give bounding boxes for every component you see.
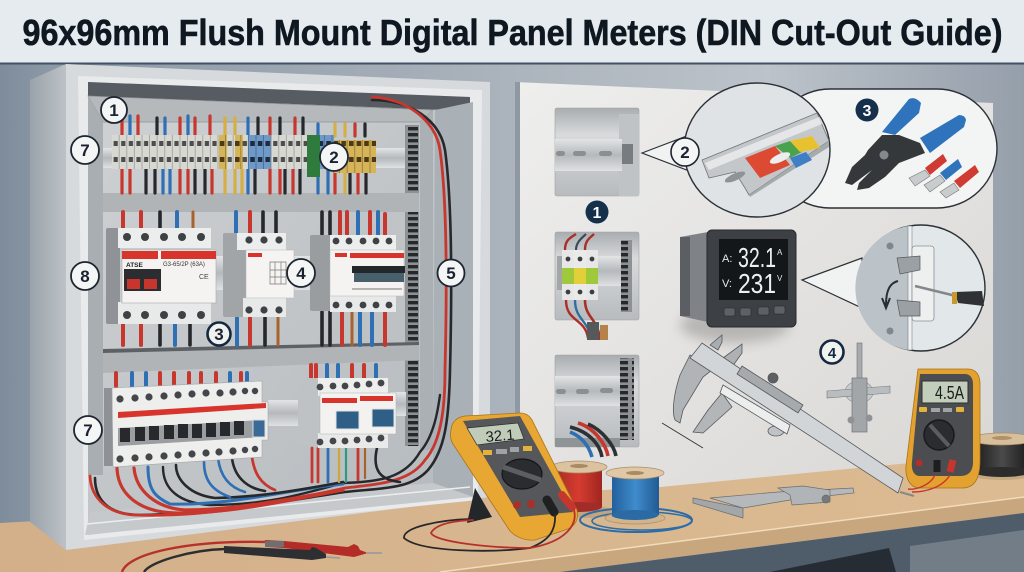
step badge 4: 4: [828, 345, 837, 362]
meter display: V: [777, 274, 783, 283]
4-pole breaker: [310, 235, 405, 312]
contactor: [223, 233, 294, 317]
right multimeter: [906, 369, 980, 492]
6-way MCB block: [298, 378, 396, 448]
icon: crimping pliers: [845, 98, 966, 190]
arrow: release direction: [882, 281, 898, 308]
meter display: A: [777, 248, 783, 257]
panel: open enclosure: [30, 64, 490, 550]
callout 8: [71, 262, 99, 290]
ATSE breaker: G3-65/2P (63A): [163, 262, 205, 268]
cut-out 1: DIN rail: [555, 108, 639, 196]
badge 3: 3: [863, 103, 872, 120]
meter display: V:: [722, 278, 732, 290]
callout 4: 4: [296, 264, 306, 283]
callout 7 upper: [71, 136, 99, 164]
panel: cut-out board: [515, 82, 993, 505]
inset: DIN rail magnified: [684, 83, 830, 217]
terminal wires: [116, 116, 385, 386]
callout 5: 5: [446, 264, 456, 283]
callout 7 lower: [74, 416, 102, 444]
red wire spool: [551, 461, 614, 518]
icon: screwdriver: [915, 286, 984, 306]
cut-out 3: cable entry: [555, 355, 639, 457]
step badge 1: [586, 200, 608, 224]
ATSE breaker: ATSE: [126, 262, 144, 269]
callout badge 2: 2: [680, 143, 690, 162]
callout 1: [101, 97, 127, 123]
inset: crimper and ferrules: [770, 89, 997, 208]
wire ducts and shelves: [88, 96, 433, 475]
callout pointer: clip detail: [802, 258, 862, 308]
inset: mounting clip and screwdriver: [855, 225, 985, 351]
callout badge 2: [671, 138, 699, 166]
icon: hole cutter tool: [827, 343, 890, 432]
terminal block rail: [112, 135, 376, 177]
callout 7 upper: 7: [80, 141, 90, 160]
digital panel meter: [680, 230, 796, 343]
meter display: A:: [722, 253, 732, 265]
callout 5: [438, 260, 464, 286]
test plugs: [547, 495, 572, 512]
ATSE breaker: [106, 228, 216, 324]
icon: vernier caliper: [662, 335, 914, 496]
title banner: [0, 0, 1024, 64]
badge 3: [856, 98, 878, 122]
meter display: 231: [738, 268, 776, 299]
DIN rails: [103, 148, 406, 426]
meter buttons: [724, 306, 785, 316]
meter display: 32.1: [738, 242, 776, 273]
enclosure interior: [85, 82, 473, 535]
icon: depth gauge on bench: [693, 486, 854, 518]
black wire spool: [969, 433, 1024, 480]
callout 3: [208, 322, 230, 346]
callout 8: 8: [80, 267, 90, 286]
central multimeter: 32.1: [485, 427, 515, 446]
test probes: [122, 540, 382, 572]
callout 7 lower: 7: [83, 421, 93, 440]
meter display: [719, 239, 788, 300]
step badge 4: [820, 340, 844, 364]
callout 3: 3: [214, 325, 224, 344]
step badge 1: 1: [593, 205, 602, 222]
blue wire coil and spool: [580, 467, 692, 532]
callout pointer: DIN rail: [642, 134, 692, 172]
callout 2: 2: [329, 148, 339, 167]
11-way MCB row: [104, 381, 268, 467]
icon: crimp terminals: [909, 154, 979, 198]
workbench: [0, 458, 1024, 572]
main wire harness: [90, 97, 451, 515]
ATSE breaker: CE: [199, 274, 209, 281]
right multimeter: 4.5A: [935, 383, 964, 403]
callout 4: [287, 259, 315, 287]
callout 2: [320, 143, 348, 171]
central multimeter: [450, 413, 578, 540]
enclosure shell: [30, 64, 490, 550]
meter test leads on bench: [404, 510, 575, 551]
callouts: enclosure numbers: [71, 97, 464, 444]
cut-out 2: wired breaker: [555, 232, 639, 340]
callout 1: 1: [109, 101, 119, 120]
